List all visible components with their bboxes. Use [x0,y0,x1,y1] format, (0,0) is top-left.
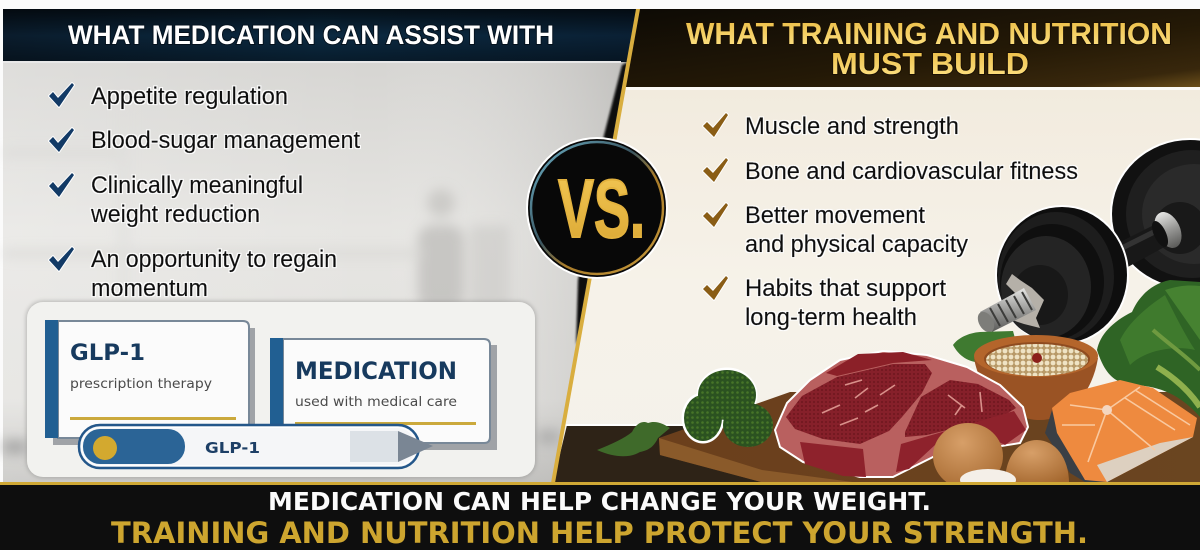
right panel background [552,88,1200,483]
pill label: glp-1 [79,425,433,468]
checklist: medication [49,83,360,302]
illustration: salmon [1045,380,1197,482]
divider line [551,9,640,483]
left panel background [3,62,628,483]
illustration: steak [775,351,1028,477]
item: habits that support long-term health: Habits that support [745,275,946,302]
item: habits that support long-term health [703,275,946,331]
item: an opportunity to regain momentum: momentum [91,275,208,302]
vs text: VS. [558,162,645,255]
used with medical care: used with medical care [295,394,457,410]
illustration: lettuce [1097,280,1200,417]
item: clinically meaningful weight reduction: Clinically meaningful [91,172,303,199]
card: glp-1 [45,320,255,445]
item: habits that support long-term health: long-term health [745,304,917,331]
banner line two: TRAINING AND NUTRITION HELP PROTECT YOUR STRENGTH. [111,516,1088,550]
item: bone and cardiovascular fitness: Bone and cardiovascular fitness [745,158,1078,185]
item: clinically meaningful weight reduction [49,172,303,228]
heading: what medication can assist with: WHAT MEDICATION CAN ASSIST WITH [68,20,554,50]
illustration: grain bowl [974,335,1098,420]
item: an opportunity to regain momentum: An opportunity to regain [91,246,337,273]
banner line one: MEDICATION CAN HELP CHANGE YOUR WEIGHT. [268,487,931,516]
far plate [1110,138,1200,290]
prescription therapy: prescription therapy [70,377,212,392]
checklist: training and nutrition [703,113,1078,331]
right header band [623,9,1200,90]
heading: what training and nutrition must build [686,16,1172,81]
pill label: glp-1: GLP-1 [205,439,260,457]
item: better movement and physical capacity: Better movement [745,202,925,229]
item: an opportunity to regain momentum [49,246,337,302]
item: better movement and physical capacity [703,202,968,258]
card tray [26,301,536,478]
illustration: eggs [933,423,1069,491]
medication title: MEDICATION [295,357,457,385]
item: muscle and strength: Muscle and strength [745,113,959,140]
item: blood-sugar management: Blood-sugar management [91,127,360,154]
handle [1112,208,1187,268]
illustration: herb leaves [597,331,1016,456]
heading: what training and nutrition must build: MUST BUILD [831,46,1029,81]
heading: what training and nutrition must build: WHAT TRAINING AND NUTRITION [686,16,1172,51]
glp-1 title: GLP-1 [70,341,145,366]
bottom banner [0,482,1200,550]
threaded bolt and nut [974,274,1044,335]
illustration: dumbbell [974,138,1200,345]
left header band [3,9,637,63]
panel: medication [3,9,637,483]
arrow [398,431,433,462]
item: better movement and physical capacity: and physical capacity [745,231,968,258]
item: appetite regulation: Appetite regulation [91,83,288,110]
illustration: broccoli [683,369,773,447]
vs badge [526,137,668,279]
illustration: table and cutting board [553,392,1200,483]
panel: glp-1 medication cards [26,301,536,478]
card: medication [270,338,497,450]
panel: training and nutrition [552,9,1200,491]
item: clinically meaningful weight reduction: weight reduction [90,201,260,228]
near plate [995,205,1129,345]
